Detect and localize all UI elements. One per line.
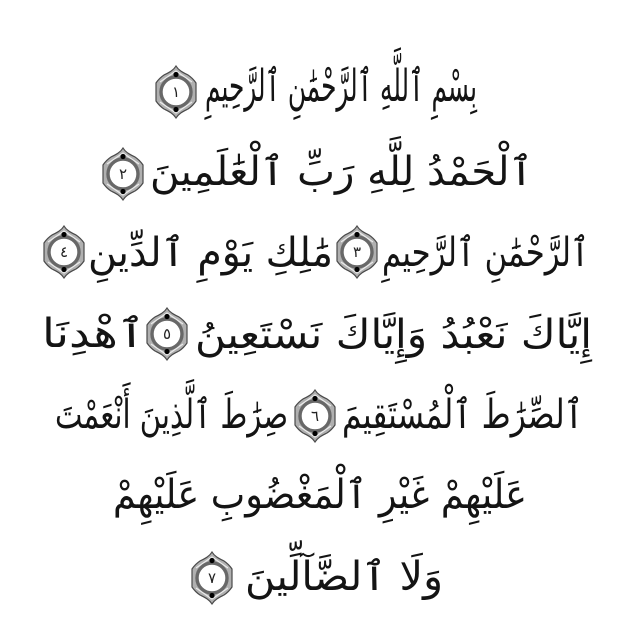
medallion: verse 1: ١ — [172, 83, 180, 101]
verse 7 last line: وَلَا ٱلضَّآلِّينَ — [245, 540, 443, 600]
medallion: verse 5: ٥ — [163, 325, 171, 343]
verse 6 opening text: ٱهْدِنَا — [42, 311, 145, 357]
medallion: verse 5 — [147, 308, 187, 360]
medallion: verse 6: ٦ — [311, 407, 319, 425]
medallion: verse 4 — [44, 226, 84, 278]
verse 2 text: ٱلْحَمْدُ لِلَّهِ رَبِّ ٱلْعَٰلَمِينَ — [150, 135, 533, 195]
medallion: verse 3: ٣ — [353, 243, 361, 261]
verse 4 text: مَٰلِكِ يَوْمِ ٱلدِّينِ — [88, 229, 333, 284]
medallion: verse 4: ٤ — [60, 243, 68, 261]
medallion: verse 7: ٧ — [208, 569, 216, 587]
medallion: verse 6 — [295, 390, 335, 442]
medallion: verse 7 — [192, 552, 232, 604]
medallion: verse 2: ٢ — [119, 165, 127, 183]
medallion: verse 2 — [103, 148, 143, 200]
verse 7 first part: صِرَٰطَ ٱلَّذِينَ أَنْعَمْتَ — [55, 378, 288, 438]
verse 5 text: إِيَّاكَ نَعْبُدُ وَإِيَّاكَ نَسْتَعِينُ — [195, 311, 592, 365]
medallion: verse 3 — [337, 226, 377, 278]
verse 7 second line: عَلَيْهِمْ غَيْرِ ٱلْمَغْضُوبِ عَلَيْهِمْ — [113, 464, 527, 526]
medallion: verse 1 — [156, 66, 196, 118]
